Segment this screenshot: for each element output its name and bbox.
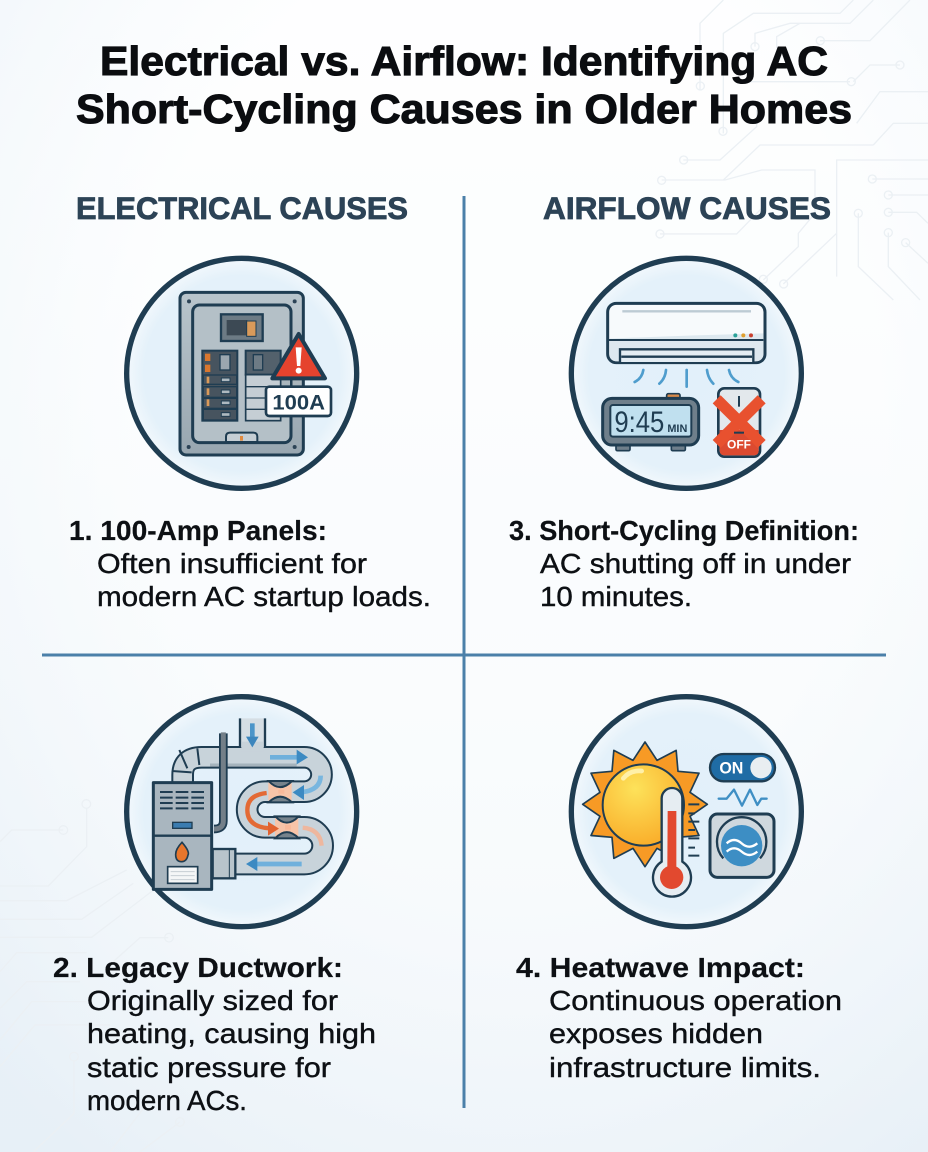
- icon: sun, thermometer and running AC control: [571, 697, 801, 927]
- text: legacy ductwork: 2. Legacy Ductwork:: [53, 952, 343, 983]
- text: heatwave impact: exposes hidden: [549, 1018, 763, 1049]
- text: 100-amp panels: modern AC startup loads.: [97, 581, 431, 612]
- text: 100-amp panels: [69, 515, 431, 612]
- text: legacy ductwork: static pressure for: [87, 1052, 331, 1083]
- circuit pattern: top right: [656, 0, 928, 300]
- title: Electrical vs. Airflow: Identifying AC: [100, 38, 828, 84]
- icon: AC unit, timer and off switch: OFF: [727, 438, 751, 452]
- heading: electrical causes: ELECTRICAL CAUSES: [76, 190, 408, 226]
- text: 100-amp panels: 1. 100-Amp Panels:: [69, 515, 327, 546]
- text: heatwave impact: Continuous operation: [549, 985, 842, 1016]
- title: Short-Cycling Causes in Older Homes: [76, 86, 852, 132]
- icon: furnace with restricted ducts: [127, 697, 357, 927]
- panel: heatwave impact: [516, 697, 842, 1083]
- text: legacy ductwork: [53, 952, 376, 1116]
- icon: AC unit, timer and off switch: MIN: [667, 423, 687, 435]
- panel: short-cycling definition: [509, 258, 859, 612]
- text: short-cycling definition: 10 minutes.: [540, 581, 692, 612]
- text: legacy ductwork: heating, causing high: [87, 1018, 376, 1049]
- icon: AC unit, timer and off switch: 9:45: [614, 406, 664, 439]
- text: short-cycling definition: AC shutting off in under: [540, 548, 851, 579]
- text: short-cycling definition: 3. Short-Cycling Definition:: [509, 515, 859, 546]
- text: heatwave impact: infrastructure limits.: [549, 1052, 821, 1083]
- icon: electrical panel with warning: 100A: [272, 389, 325, 414]
- quadrant divider lines: [42, 196, 886, 1108]
- text: 100-amp panels: Often insufficient for: [97, 548, 367, 579]
- circuit pattern: bottom left: [0, 800, 184, 1152]
- text: heatwave impact: 4. Heatwave Impact:: [516, 952, 805, 983]
- icon: electrical panel with warning: [127, 258, 357, 488]
- title: [76, 38, 852, 132]
- text: heatwave impact: [516, 952, 842, 1083]
- heading: airflow causes: AIRFLOW CAUSES: [543, 190, 831, 226]
- panel: legacy ductwork: [53, 697, 376, 1116]
- text: legacy ductwork: modern ACs.: [87, 1085, 247, 1116]
- panel: 100-amp panels: [69, 258, 431, 612]
- icon: AC unit, timer and off switch: [571, 258, 801, 488]
- text: short-cycling definition: [509, 515, 859, 612]
- text: legacy ductwork: Originally sized for: [87, 985, 338, 1016]
- icon: sun, thermometer and running AC control: ON: [719, 759, 743, 778]
